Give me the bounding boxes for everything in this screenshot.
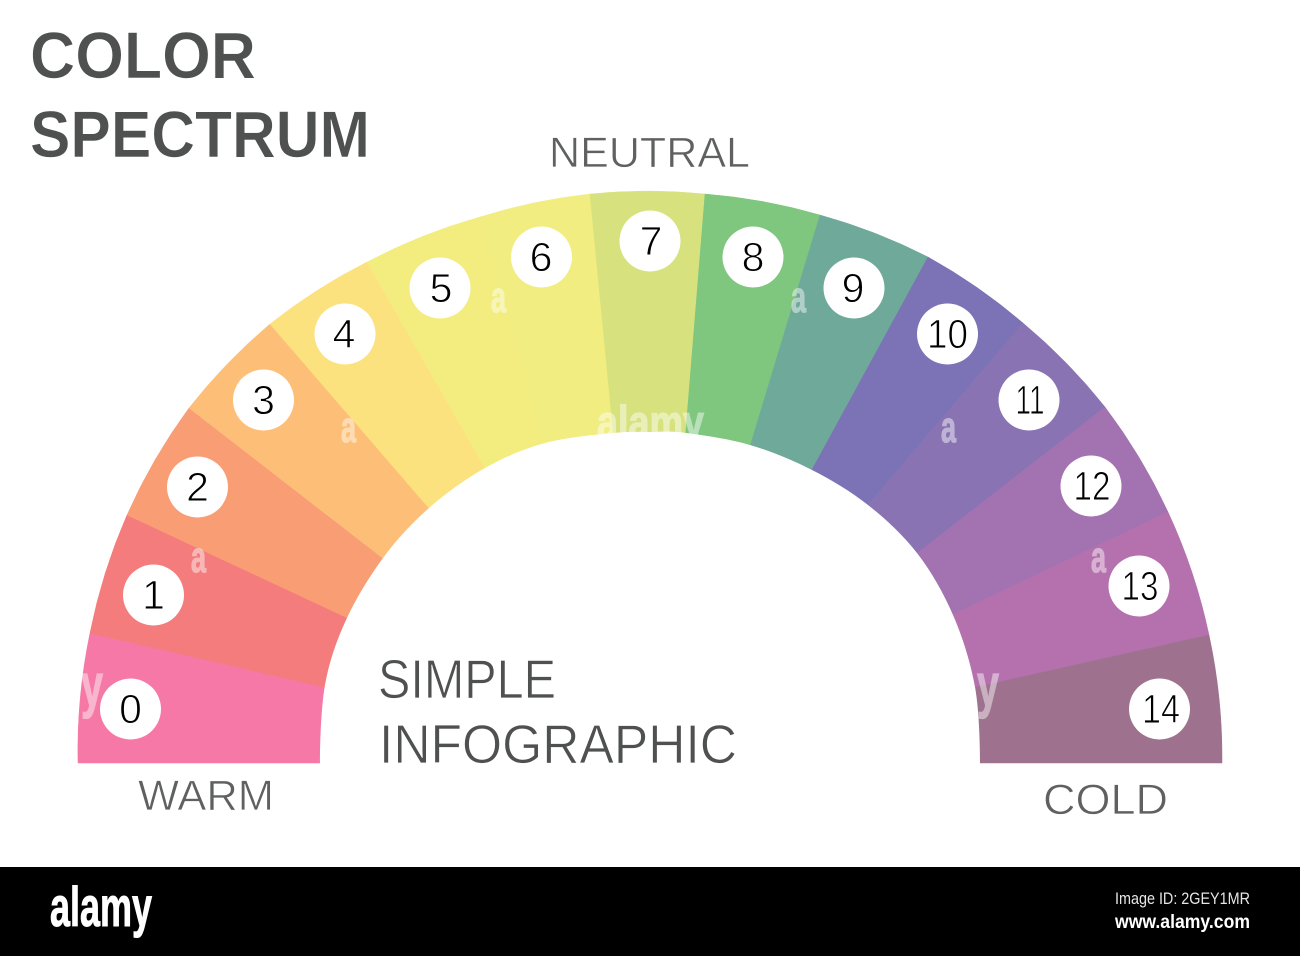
watermark overlays: alamy <box>597 396 704 448</box>
half-ring spectrum chart <box>78 191 1222 763</box>
numbers: 4 <box>333 311 355 357</box>
numbers: 11 <box>1016 377 1044 423</box>
watermark overlays: a <box>191 533 206 582</box>
numbers: 8 <box>742 234 764 280</box>
numbers: 2 <box>186 464 209 510</box>
title: SPECTRUM <box>30 97 370 171</box>
numbers: 7 <box>640 218 662 264</box>
segment 5 <box>367 217 547 475</box>
watermark overlays: a <box>341 403 356 452</box>
footer bar <box>0 867 1300 956</box>
numbers: 13 <box>1122 563 1158 609</box>
segment 0 <box>78 633 332 763</box>
subtitle: SIMPLE <box>378 648 556 710</box>
segment 3 <box>189 324 434 563</box>
image id: Image ID: 2GEY1MR <box>1115 889 1250 908</box>
label: warm: WARM <box>138 772 274 820</box>
number badges <box>100 210 1190 740</box>
segment 6 <box>480 194 614 451</box>
watermark overlays: a <box>491 273 506 322</box>
footer logo: alamy <box>50 875 152 938</box>
watermark overlays: y <box>81 652 103 719</box>
segment 13 <box>946 512 1209 689</box>
segment 9 <box>748 215 928 477</box>
watermark overlays <box>81 273 1106 719</box>
numbers: 10 <box>927 311 968 357</box>
watermark overlays: a <box>941 403 956 452</box>
numbers: 6 <box>530 234 552 280</box>
segment 11 <box>863 323 1105 558</box>
numbers: 12 <box>1074 463 1110 509</box>
numbers: 0 <box>119 686 142 732</box>
numbers: 1 <box>142 572 165 618</box>
watermark overlays: a <box>1091 533 1106 582</box>
inner white cut-out <box>320 432 980 764</box>
website: www.alamy.com <box>1114 912 1250 933</box>
segment 1 <box>90 515 354 689</box>
numbers: 3 <box>252 377 275 423</box>
segment 8 <box>685 194 820 453</box>
subtitle: INFOGRAPHIC <box>379 713 737 775</box>
segment 7 <box>590 191 705 441</box>
title: COLOR <box>30 18 256 92</box>
numbers: 5 <box>430 265 452 311</box>
numbers: 9 <box>842 265 864 311</box>
numbers <box>119 218 1180 732</box>
watermark overlays: a <box>791 273 806 322</box>
watermark overlays: y <box>977 652 999 719</box>
segment 10 <box>808 257 1023 511</box>
segment 12 <box>911 407 1168 618</box>
segment 2 <box>127 408 389 621</box>
title <box>30 18 370 171</box>
numbers: 14 <box>1142 686 1180 732</box>
segment 4 <box>270 262 489 514</box>
label: neutral: NEUTRAL <box>549 129 750 177</box>
subtitle <box>378 648 737 775</box>
segment 14 <box>968 635 1222 763</box>
label: cold: COLD <box>1043 776 1168 824</box>
